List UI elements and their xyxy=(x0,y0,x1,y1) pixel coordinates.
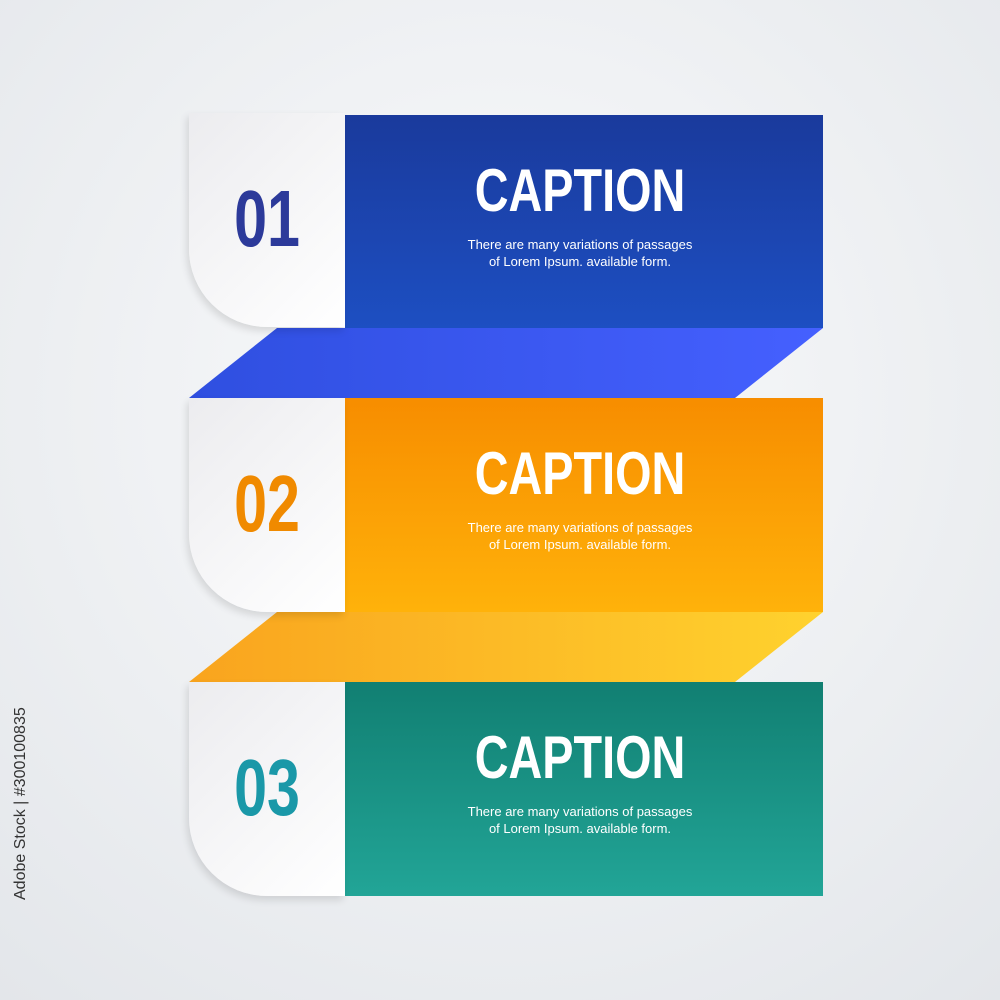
tab 1 xyxy=(189,113,345,327)
band 2 xyxy=(189,612,823,682)
panel 2 xyxy=(345,398,823,612)
caption 2: CAPTION xyxy=(475,440,685,507)
text 2: of Lorem Ipsum. available form. xyxy=(489,537,671,552)
text 2 xyxy=(468,520,692,552)
text 2: There are many variations of passages xyxy=(468,520,692,535)
tab 2 xyxy=(189,398,345,612)
caption 1: CAPTION xyxy=(475,157,685,224)
text 3 xyxy=(468,804,692,836)
text 3: of Lorem Ipsum. available form. xyxy=(489,821,671,836)
panel 3 xyxy=(345,682,823,896)
text 1 xyxy=(468,237,692,269)
band 1 xyxy=(189,328,823,398)
tab 1: 01 xyxy=(234,174,300,263)
tab 3 xyxy=(189,682,345,896)
watermark id: Adobe Stock | #300100835 xyxy=(12,707,29,900)
tab 2: 02 xyxy=(234,459,300,548)
caption 3: CAPTION xyxy=(475,724,685,791)
text 3: There are many variations of passages xyxy=(468,804,692,819)
text 1: There are many variations of passages xyxy=(468,237,692,252)
tab 3: 03 xyxy=(234,743,300,832)
text 1: of Lorem Ipsum. available form. xyxy=(489,254,671,269)
panel 1 xyxy=(345,115,823,328)
